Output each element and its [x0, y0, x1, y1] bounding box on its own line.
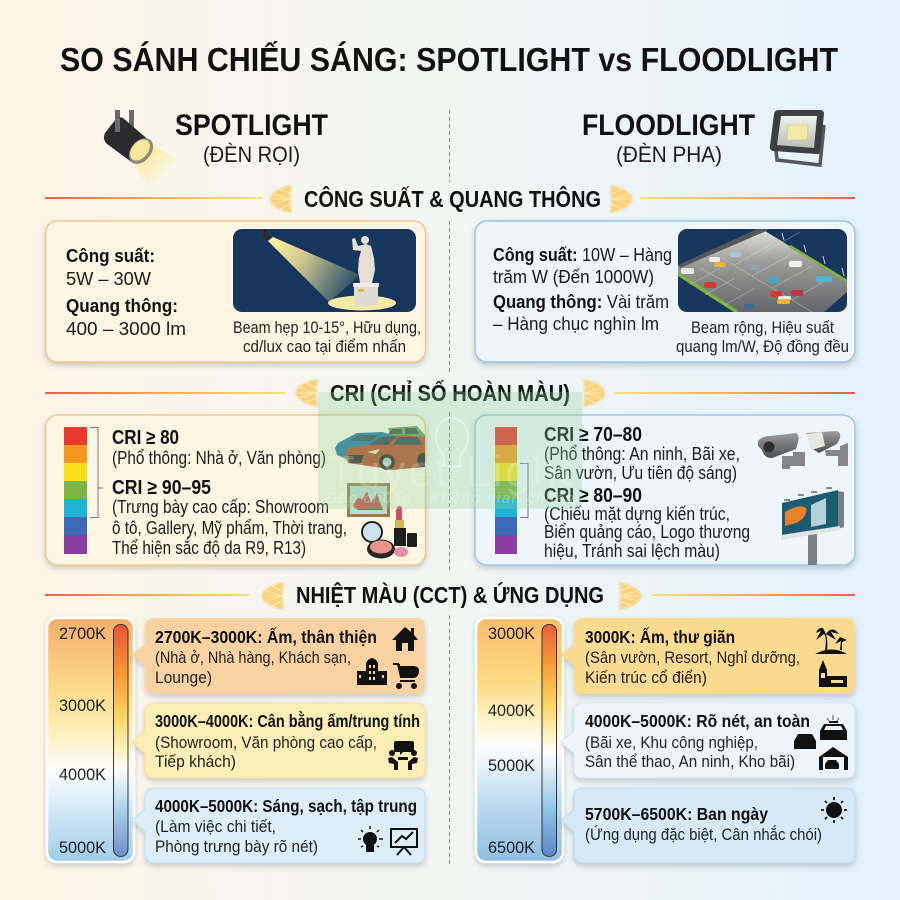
card text: Lounge) [155, 668, 212, 687]
panel: spotlight CRI [46, 415, 431, 565]
scale labels: 3000K [488, 624, 536, 643]
CRI text: (Chiếu mặt dựng kiến trúc, [544, 503, 730, 524]
power text: 400 – 3000 lm [66, 318, 186, 339]
card text [585, 626, 800, 687]
icon: service cart [393, 664, 418, 688]
caption: Beam hẹp 10-15°, Hữu dụng, [233, 318, 421, 337]
CRI text: CRI ≥ 80–90 [544, 485, 642, 507]
CRI text: Thể hiện sắc độ da R9, R13) [112, 537, 306, 558]
icon: garage [819, 747, 848, 770]
icon: light bulb [358, 826, 383, 852]
heading: floodlight: FLOODLIGHT [582, 109, 755, 142]
heading: spotlight: SPOTLIGHT [175, 109, 328, 142]
scale labels: 3000K [59, 696, 107, 715]
illustration: painting [347, 483, 390, 517]
caption: Beam rộng, Hiệu suất [691, 318, 834, 337]
card: 2700K-3000K [132, 618, 425, 694]
card: 4000K-5000K [561, 703, 855, 778]
card text: (Showroom, Văn phòng cao cấp, [155, 733, 377, 752]
scale labels: 4000K [59, 765, 107, 784]
illustration: parking lot [678, 229, 847, 313]
illustration: security cameras [758, 431, 848, 469]
power text [66, 245, 186, 339]
icon: spotlight [104, 110, 178, 186]
panel: floodlight CCT scale [476, 618, 563, 862]
CRI text: CRI ≥ 80 [112, 427, 179, 449]
card text: (Làm việc chi tiết, [155, 817, 276, 836]
heading: spotlight [175, 109, 328, 167]
card text: 3000K–4000K: Cân bằng ấm/trung tính [155, 710, 420, 731]
card text: (Ứng dụng đặc biệt, Cân nhắc chói) [585, 825, 822, 844]
scale bar [114, 624, 128, 856]
card text: Sân thể thao, An ninh, Kho bãi) [585, 752, 795, 771]
title: SO SÁNH CHIẾU SÁNG: SPOTLIGHT vs FLOODLIGHT [60, 41, 838, 79]
scale labels: 2700K [59, 624, 107, 643]
watermark [318, 392, 582, 509]
watermark: Đèn chuẩn - Không gian chuẩn [326, 490, 574, 507]
panel: spotlight power [46, 221, 426, 362]
CRI text: (Phổ thông: An ninh, Bãi xe, [544, 443, 740, 464]
card: 5700K-6500K [561, 788, 855, 863]
section heading: CRI [45, 378, 855, 407]
panel: floodlight CRI [475, 415, 855, 565]
CRI text: hiệu, Tránh sai lệch màu) [544, 540, 720, 561]
CRI text: Biển quảng cáo, Logo thương [544, 521, 750, 542]
card text: (Sân vườn, Resort, Nghỉ dưỡng, [585, 648, 800, 667]
card text: 4000K–5000K: Sáng, sạch, tập trung [155, 796, 417, 816]
scale labels: 6500K [488, 838, 536, 857]
icon: historic building [819, 660, 847, 687]
icon: palm island [815, 628, 847, 654]
color spectrum bar [495, 427, 517, 554]
illustration: statue under spotlight [233, 229, 416, 312]
illustration: billboard [781, 488, 844, 565]
card: 3000K-4000K [132, 703, 425, 778]
caption [676, 318, 849, 356]
heading: floodlight: (ĐÈN PHA) [616, 142, 722, 167]
illustration: cars [335, 426, 431, 470]
center divider [448, 110, 450, 866]
section heading: CRI: CRI (CHỈ SỐ HOÀN MÀU) [330, 378, 570, 406]
section heading: power and flux: CÔNG SUẤT & QUANG THÔNG [304, 185, 601, 212]
caption [233, 318, 421, 356]
card text: (Nhà ở, Nhà hàng, Khách sạn, [155, 648, 351, 667]
panel: spotlight CCT scale [47, 618, 134, 862]
CRI text [544, 424, 750, 561]
CRI text: CRI ≥ 70–80 [544, 424, 642, 446]
icon: car [794, 734, 816, 749]
CRI text: (Trưng bày cao cấp: Showroom [112, 496, 329, 517]
icon: sun [821, 797, 847, 823]
CRI text: ô tô, Gallery, Mỹ phẩm, Thời trang, [112, 517, 347, 538]
icon: floodlight [770, 110, 824, 165]
card text [155, 796, 417, 856]
card text: 5700K–6500K: Ban ngày [585, 804, 768, 824]
icon: meeting [388, 741, 418, 770]
watermark: Tuyet Light [328, 447, 572, 496]
power text: Quang thông: [66, 295, 178, 316]
card text [585, 711, 810, 771]
scale labels: 5000K [59, 838, 107, 857]
icon: hotel building [357, 658, 387, 685]
power text: – Hàng chục nghìn lm [493, 313, 659, 334]
bracket [90, 428, 103, 518]
power text: Công suất: [66, 245, 155, 266]
card: 4000K-5000K [132, 788, 425, 863]
illustration: cosmetics [362, 506, 417, 558]
power text: Quang thông: Vài trăm [493, 291, 669, 312]
card text: Phòng trưng bày rõ nét) [155, 837, 318, 856]
scale bar [542, 624, 556, 856]
bracket [520, 464, 528, 518]
section heading: CCT: NHIỆT MÀU (CCT) & ỨNG DỤNG [296, 581, 604, 608]
card text [155, 710, 420, 771]
section heading: CCT [45, 581, 855, 610]
caption: quang lm/W, Độ đồng đều [676, 337, 849, 356]
heading: spotlight: (ĐÈN RỌI) [203, 142, 300, 167]
icon: house [392, 627, 418, 651]
card text: Kiến trúc cổ điển) [585, 668, 707, 687]
color spectrum bar [64, 427, 87, 554]
power text [493, 244, 672, 334]
scale labels: 5000K [488, 756, 536, 775]
icon: patrol car [820, 715, 847, 740]
card text: Tiếp khách) [155, 752, 236, 771]
CRI text [112, 427, 347, 558]
scale labels [488, 624, 536, 857]
CRI text: CRI ≥ 90–95 [112, 477, 211, 499]
card text: 2700K–3000K: Ấm, thân thiện [155, 626, 377, 647]
power text: trăm W (Đến 1000W) [493, 266, 654, 287]
card text [155, 626, 377, 687]
card text [585, 804, 822, 844]
card text: (Bãi xe, Khu công nghiệp, [585, 733, 758, 752]
heading: floodlight [582, 109, 755, 167]
card: 3000K [561, 618, 855, 694]
panel: floodlight power [475, 221, 855, 362]
scale labels: 4000K [488, 701, 536, 720]
power text: Công suất: 10W – Hàng [493, 244, 672, 265]
card text: 4000K–5000K: Rõ nét, an toàn [585, 711, 810, 731]
power text: 5W – 30W [66, 268, 152, 289]
CRI text: (Phổ thông: Nhà ở, Văn phòng) [112, 447, 326, 468]
card text: 3000K: Ấm, thư giãn [585, 626, 735, 647]
icon: presentation chart [391, 829, 417, 855]
CRI text: Sân vườn, Ưu tiên độ sáng) [544, 462, 737, 483]
scale labels [59, 624, 107, 857]
caption: cd/lux cao tại điểm nhấn [243, 337, 406, 356]
section heading: power and flux [45, 185, 855, 213]
